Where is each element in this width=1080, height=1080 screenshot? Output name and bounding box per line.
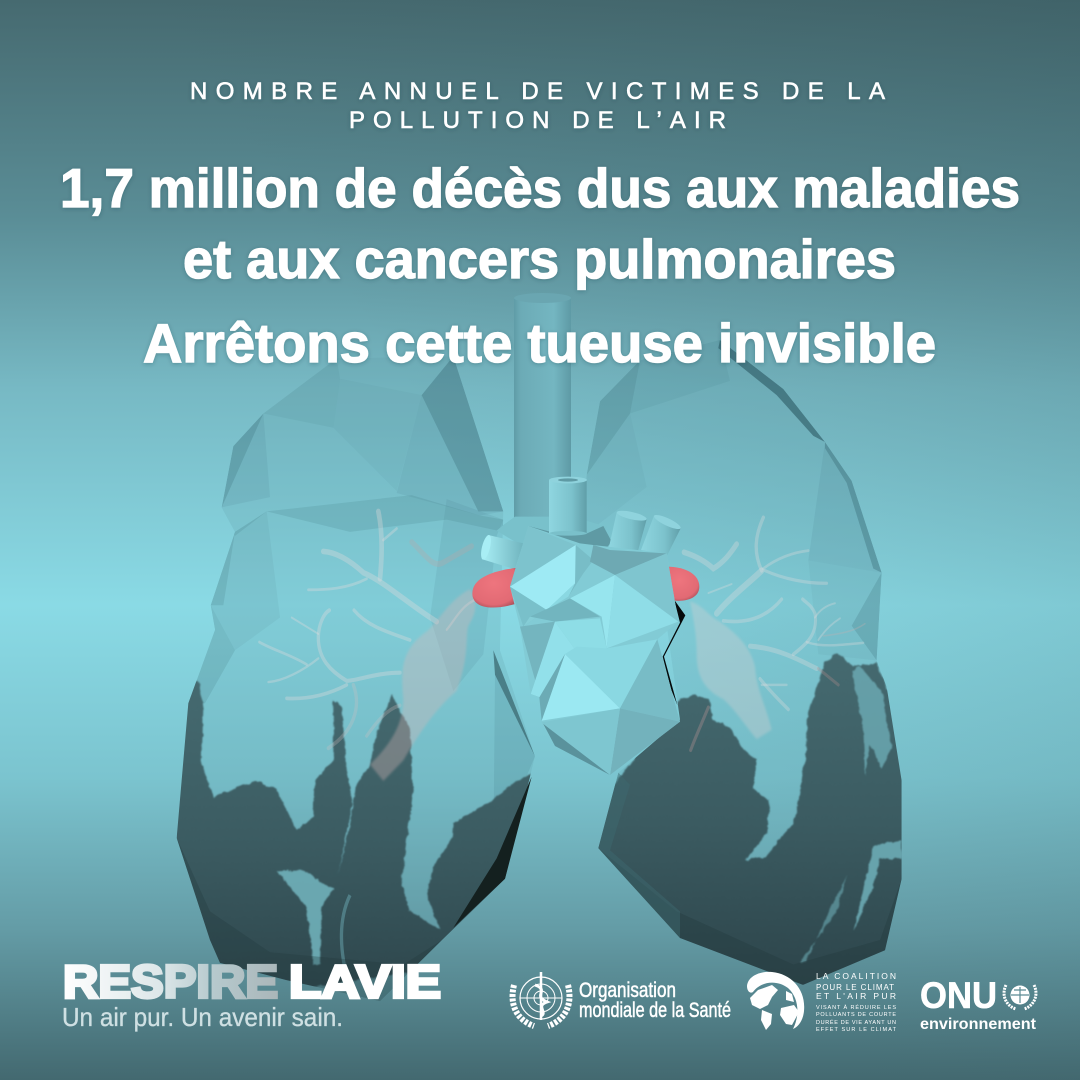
campaign logo: Respire la vie: LAVIE: [289, 956, 441, 1008]
dark top of heart: [528, 526, 612, 560]
right lung: [580, 340, 910, 993]
left lung: [170, 356, 535, 1009]
heart and great vessels: [472, 477, 699, 775]
trachea: [514, 293, 571, 538]
emblem: [513, 972, 569, 1026]
campaign logo: Respire la vie: RESPIRE: [63, 956, 278, 1008]
coalition text: EFFET SUR LE CLIMAT: [816, 1027, 897, 1033]
main heading: [60, 157, 1020, 374]
coalition text: DURÉE DE VIE AYANT UN: [816, 1019, 896, 1026]
left lung dark edge sliver: [453, 777, 532, 928]
logo: Climate and Clean Air Coalition: [747, 971, 897, 1033]
left main bronchus: [370, 589, 475, 781]
heart facets: [510, 526, 680, 775]
name: [579, 979, 731, 1022]
coalition text: VISANT À RÉDUIRE LES: [816, 1004, 896, 1011]
left lung body facets: [196, 360, 535, 798]
campaign tagline: Un air pur. Un avenir sain.: [62, 1002, 343, 1032]
left lung pollution silhouette: [170, 681, 535, 1009]
coalition text: [816, 971, 897, 1033]
logo: UN Environment: [920, 975, 1037, 1033]
emblem: [1004, 985, 1036, 1009]
coalition text: LA COALITION: [816, 971, 896, 981]
main heading: et aux cancers pulmonaires: [183, 228, 896, 290]
ONU wordmark: ONU: [920, 975, 997, 1016]
right lung pollution silhouette: [598, 652, 902, 985]
red vessels: [472, 567, 699, 608]
right main bronchus: [690, 601, 772, 739]
small heading: [190, 78, 885, 134]
name: mondiale de la Santé: [579, 999, 731, 1022]
campaign logo: Respire la vie: [63, 956, 441, 1008]
right lung airway branches: [684, 518, 865, 750]
coalition text: POLLUANTS DE COURTE: [816, 1012, 896, 1018]
globe and swoosh: [747, 972, 804, 1030]
trachea base and left bronchus: [479, 517, 607, 569]
coalition text: POUR LE CLIMAT: [816, 983, 894, 992]
right lung body facets: [586, 340, 882, 730]
main heading: Arrêtons cette tueuse invisible: [143, 312, 936, 374]
name: Organisation: [579, 979, 676, 1002]
small heading: NOMBRE ANNUEL DE VICTIMES DE LA: [190, 78, 885, 105]
crack shadow: [663, 600, 685, 705]
main heading: 1,7 million de décès dus aux maladies: [60, 157, 1020, 219]
small heading: POLLUTION DE L’AIR: [349, 107, 726, 134]
environnement wordmark: environnement: [920, 1016, 1037, 1033]
vessel cylinders: [549, 477, 682, 556]
logo: World Health Organization: [513, 972, 731, 1026]
coalition text: ET L'AIR PUR: [816, 991, 896, 1001]
left lung airway branches: [259, 511, 483, 748]
